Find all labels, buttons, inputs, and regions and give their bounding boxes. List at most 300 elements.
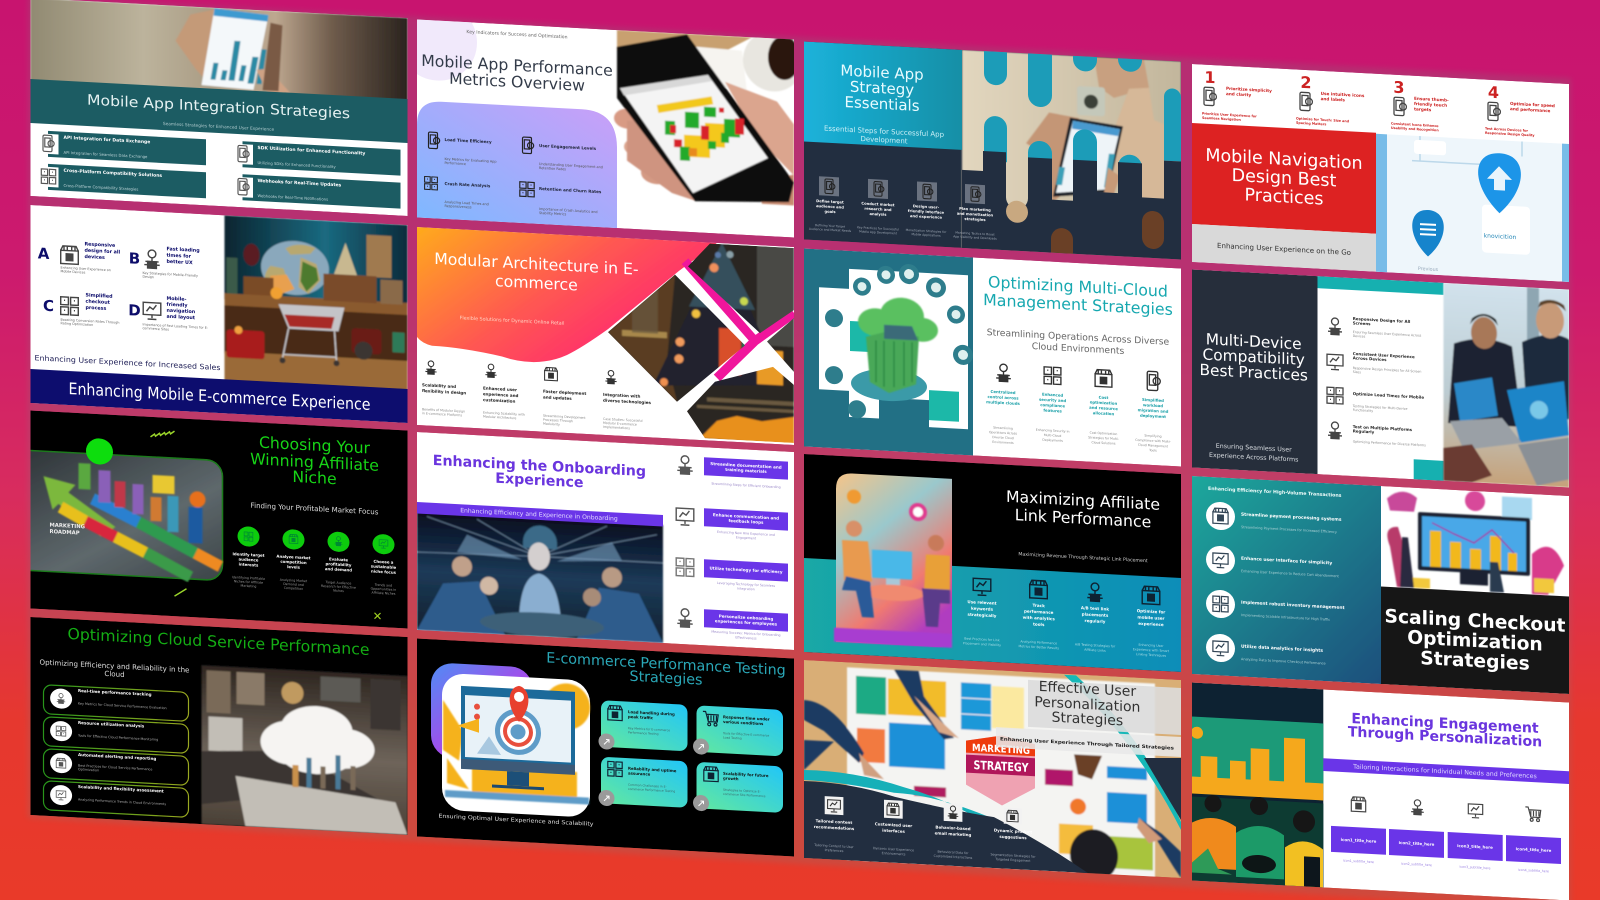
item 3: Target Audience	[325, 580, 351, 586]
pill: resource	[44, 717, 188, 753]
title: Niche	[292, 467, 337, 488]
title: Strategy	[850, 78, 914, 99]
title band	[30, 369, 408, 423]
item 4: Dynamic product	[994, 828, 1032, 835]
step 2	[1296, 73, 1365, 128]
item 1: Tailoring Content to User	[813, 843, 854, 849]
item 3: profitability	[326, 561, 352, 568]
step 2: Engagement	[736, 535, 757, 541]
item A: A	[38, 244, 50, 263]
illustration: analytics monitor	[1387, 486, 1564, 596]
teal lower band	[804, 558, 1181, 672]
metric: retention: Stability Metrics	[539, 211, 566, 216]
photo: person with phone and money roll	[962, 50, 1181, 259]
pill: scalability: Scalability and flexibility assessment	[78, 784, 164, 794]
subtitle box	[996, 727, 1181, 757]
item: SDK utilization: SDK Utilization for Enhanced Functionality	[258, 145, 365, 157]
step 3: Leveraging Technology for Seamless	[717, 581, 775, 588]
item 3: Optimize Load Times for Mobile	[1353, 391, 1424, 400]
step 1: training materials	[725, 467, 767, 474]
metric: crash rate: Responsiveness	[444, 204, 472, 209]
metric: engagement: Understanding User Engagement and	[539, 162, 603, 169]
step 2: Optimize for Touch: Size and	[1296, 117, 1350, 123]
step 4: Plan marketing	[959, 207, 991, 212]
star accent	[374, 613, 380, 619]
step 2: Enhance communication and	[713, 512, 779, 521]
title: Choosing Your	[259, 433, 371, 458]
item 3	[321, 531, 356, 594]
item 2: Track	[1033, 603, 1045, 608]
column 2: Deployments	[1042, 438, 1063, 443]
item A	[38, 242, 120, 274]
item 4: Case Studies: Successful	[603, 417, 643, 423]
title: Modular Architecture in E-	[434, 249, 639, 279]
slide: Mobile App Performance Metrics Overview	[397, 0, 803, 238]
slide: Mobile Navigation Design Best Practices	[1192, 64, 1569, 282]
item D: and layout	[166, 314, 196, 321]
column 4: Cloud Management	[1138, 443, 1169, 448]
squiggle accent	[150, 430, 175, 438]
title: Mobile App Integration Strategies	[87, 93, 350, 122]
slide: Enhancing the Onboarding Experience	[417, 432, 794, 650]
step 4	[953, 183, 997, 241]
slide: Choosing Your Winning Affiliate Niche	[10, 409, 408, 628]
slide: Enhancing Engagement Through Personalization	[1191, 682, 1569, 900]
step 2	[676, 507, 788, 542]
column 1: Diverse Cloud	[992, 435, 1014, 440]
icon box 4: icon4_subtitle_here	[1518, 868, 1549, 873]
item 1	[422, 360, 466, 418]
item 3: Streamlining Development	[543, 414, 586, 420]
item 4: Targeted Engagement	[994, 857, 1031, 863]
subtitle: Key Indicators for Success and Optimization	[466, 29, 568, 40]
card 3: Common Challenges in E-	[628, 783, 667, 789]
panel heading: Enhancing Efficiency for High-Volume Transactions	[1208, 486, 1342, 499]
pill: alerting: Automated alerting and reporting	[78, 752, 156, 761]
slide: Mobile App Integration Strategies	[30, 0, 408, 216]
step 3	[1391, 78, 1449, 133]
item 1: Preferences	[825, 848, 844, 853]
item 4	[1328, 422, 1426, 447]
step 2: feedback loops	[729, 518, 764, 525]
item 4: Regularly	[1353, 428, 1375, 434]
item 2: interfaces	[882, 828, 905, 834]
metric: engagement: User Engagement Levels	[539, 143, 597, 151]
slide: Optimizing Multi-Cloud Management Strategies	[804, 248, 1181, 466]
subtitle: Enhancing User Experience Through Tailored Strategies	[1000, 736, 1174, 752]
card 2: Response time under	[723, 714, 770, 722]
card 3: commerce Performance Testing	[628, 787, 675, 793]
row 2	[1206, 545, 1340, 580]
step 4: Marketing Tactics to Boost	[955, 231, 995, 237]
column 3: Cost Optimization	[1090, 431, 1117, 436]
step 1: goals	[824, 210, 836, 214]
step 2: research and	[864, 207, 892, 212]
title: Essentials	[844, 93, 920, 115]
metric: crash rate	[425, 177, 491, 210]
column 2	[1036, 366, 1069, 443]
item 2: Consistent User Experience	[1353, 351, 1415, 359]
item 3: Processes Through	[543, 418, 573, 423]
step 4: and performance	[1510, 106, 1551, 113]
step 4: Measuring Success: Metrics for Onboarding	[711, 630, 781, 637]
item 4: niche focus	[371, 569, 397, 575]
icon box 1: icon1_subtitle_here	[1343, 859, 1374, 864]
illustration: two people at laptop	[834, 473, 952, 648]
title band	[30, 79, 408, 143]
item 2	[1327, 350, 1421, 378]
column 1: control across	[987, 394, 1019, 401]
column 2: Multi-Cloud	[1044, 433, 1061, 438]
item 1: keywords	[971, 606, 994, 612]
step 4: strategies	[964, 217, 986, 222]
title: E-commerce Performance Testing	[546, 650, 786, 679]
item 4: Experience with Smart	[1133, 647, 1170, 653]
item 1: strategically	[968, 612, 997, 618]
row 3: Implement robust inventory management	[1241, 600, 1345, 611]
subtitle: Enhancing User Experience for Increased Sales	[34, 353, 221, 372]
step 3: targets	[1414, 106, 1432, 112]
item 4: experience	[1138, 621, 1164, 627]
item 2: performance	[1024, 608, 1054, 615]
item 2: Enhancements	[882, 851, 906, 856]
step 2: Enhancing New Hire Experience and	[717, 530, 775, 537]
item 2	[276, 529, 311, 591]
title: Winning Affiliate	[250, 449, 379, 475]
slide: Effective User Personalization Strategies	[804, 660, 1181, 886]
item 1: Best Practices for Link	[964, 636, 1000, 642]
step 2: Conduct market	[861, 202, 895, 207]
item 1: Scalability and	[422, 382, 456, 389]
column 4: Compliance with Multi-	[1135, 438, 1171, 444]
column 3: Strategies for Multi-	[1088, 435, 1119, 441]
card 1: Performance Testing	[628, 730, 659, 736]
title: Mobile Navigation	[1205, 146, 1363, 174]
step 3: Integration	[737, 586, 755, 591]
step 1: Defining Your Target	[815, 223, 846, 229]
step 4: experiences for employees	[715, 618, 778, 627]
item 3: A/B test link	[1081, 605, 1109, 612]
item 3: Faster deployment	[543, 389, 586, 396]
teal right curve	[1064, 675, 1181, 830]
photo: hand holding phone	[30, 0, 408, 106]
item 3: Modularity	[543, 422, 560, 427]
step 3: Consistent Icons Enhance	[1391, 122, 1439, 128]
step 4	[1485, 83, 1555, 139]
item 1: Identify target	[232, 551, 265, 558]
item 1: Placement and Visibility	[963, 641, 1001, 647]
item 2: Dynamic User Experience	[873, 846, 914, 852]
title: Management Strategies	[983, 290, 1173, 319]
title: Enhancing Engagement	[1351, 711, 1539, 737]
step 2: Mobile App Development	[859, 229, 898, 235]
item B: Design	[142, 275, 154, 279]
pill: alerting	[44, 749, 188, 785]
item 2: tools	[1033, 622, 1045, 627]
marketing strategy hexagon: MARKETING	[972, 743, 1030, 757]
roadmap image: MARKETING	[50, 523, 85, 530]
subtitle: Ensuring Optimal User Experience and Scalability	[439, 814, 594, 828]
column 3: Cloud Solutions	[1091, 440, 1116, 446]
item 3	[1075, 582, 1116, 653]
illustration: audience and bar chart	[1191, 682, 1323, 887]
card 4: commerce Site Performance	[723, 792, 766, 798]
item 2	[873, 799, 914, 857]
icon box 1: icon1_title_here	[1341, 837, 1377, 844]
step 4: 4	[1488, 83, 1499, 102]
item 2: customization	[483, 397, 516, 404]
metric: engagement: Retention Rates	[539, 166, 566, 171]
item 2: Modular Architecture	[483, 415, 516, 420]
step 2: Use intuitive icons	[1321, 91, 1365, 98]
card 4: Scalability for future	[723, 771, 769, 778]
photo: team with visor	[417, 512, 663, 643]
step 2	[857, 178, 899, 236]
slide: Enhancing Mobile E-commerce Experience	[30, 205, 408, 423]
item 3: Behavioral Data for	[938, 850, 969, 855]
title box	[1028, 680, 1181, 735]
column 1: Centralized	[990, 389, 1016, 395]
step 3: Monetization Strategies for	[906, 228, 947, 234]
metric: retention: Importance of Crash Analytics and	[539, 207, 598, 214]
column 4: deployment	[1140, 413, 1166, 419]
title: Maximizing Affiliate	[1006, 487, 1160, 514]
item 4: Opportunities in	[371, 587, 396, 592]
item C: Rating Optimization	[60, 321, 93, 327]
item 2: Analyzing Market	[280, 578, 308, 583]
title: Strategies	[1052, 710, 1123, 729]
item 4: Linking Techniques	[1136, 652, 1166, 658]
item 3: regularly	[1085, 618, 1106, 624]
dark lower overlays	[962, 150, 1181, 259]
item A: Responsive	[84, 241, 116, 249]
item 1: in E-commerce Platforms	[422, 411, 462, 417]
metric: retention	[520, 182, 602, 218]
item C: checkout	[86, 299, 111, 306]
dark curved footer	[804, 781, 1088, 873]
item 1	[963, 578, 1001, 647]
item 2: with analytics	[1023, 615, 1055, 621]
item 1: Responsive Design for All	[1353, 316, 1411, 324]
item 4: Integration with	[603, 392, 641, 399]
item 4: Optimize for	[1137, 608, 1165, 615]
column 4: workload	[1143, 402, 1163, 408]
item 1: recommendations	[814, 824, 855, 831]
photo: team with laptops	[1444, 283, 1569, 487]
item 2: Analyzing Performance	[1020, 639, 1057, 645]
item 1	[232, 526, 265, 589]
item 4: Affiliate Niches	[372, 591, 396, 596]
card 1: Key Metrics for E-commerce	[628, 726, 670, 732]
card 1: Load handling during	[628, 709, 675, 717]
item 3: email marketing	[935, 830, 972, 837]
icon box 2: icon2_subtitle_here	[1401, 862, 1432, 867]
item 3: and demand	[325, 566, 352, 573]
step 3: Ensure thumb-	[1414, 96, 1449, 103]
step 1: 1	[1204, 68, 1216, 87]
item 3: Functionality	[1353, 408, 1373, 413]
card 2: Tools for Effective E-commerce	[722, 731, 769, 738]
step 3: friendly touch	[1414, 101, 1447, 108]
item 1: Screens	[1353, 320, 1371, 326]
item 4: Choose a	[374, 559, 394, 565]
slide: E-commerce Performance Testing Strategies	[417, 638, 794, 856]
slide: Modular Architecture in E-commerce	[417, 227, 794, 445]
subtitle: Streamlining Operations Across Diverse	[987, 327, 1170, 348]
column 1	[986, 363, 1020, 445]
photo: cloud over laptop	[202, 665, 408, 835]
item 1: Benefits of Modular Design	[422, 407, 465, 414]
item: cross-platform: Cross-Platform Compatibility Strategies	[64, 183, 138, 192]
photo: location pins: knovicition	[1484, 232, 1516, 241]
step 2: Key Practices for Successful	[857, 225, 899, 232]
row 3	[1206, 589, 1345, 625]
column 1: Environments	[992, 440, 1014, 445]
item 3: placements	[1082, 612, 1109, 618]
row 2: Enhancing User Experience to Reduce Cart Abandonment	[1241, 569, 1340, 578]
item C	[44, 292, 120, 326]
row 4: Utilize data analytics for insights	[1241, 644, 1323, 654]
item 1: flexibility in design	[422, 388, 466, 395]
gray subtitle block	[1192, 224, 1376, 272]
photo: location pins	[1376, 134, 1569, 282]
item 4: diverse technologies	[603, 398, 652, 405]
column 2: compliance	[1040, 402, 1065, 408]
item 4: Trends and	[374, 583, 392, 588]
photo: globe and shopping cart	[224, 215, 408, 391]
squiggle accent lower	[174, 588, 186, 597]
card 1	[598, 700, 688, 754]
title: Enhancing Mobile E-commerce Experience	[68, 379, 370, 414]
card 3: Reliability and uptime	[628, 766, 677, 773]
title: Enhancing the Onboarding	[433, 453, 646, 480]
item 2: Sizes	[1353, 370, 1361, 374]
item B: Key Strategies for Mobile-Friendly	[142, 271, 198, 278]
step 3: Usability and Recognition	[1391, 126, 1439, 132]
step 1: and clarity	[1226, 91, 1251, 97]
title: Compatibility	[1202, 346, 1305, 369]
slide: Scaling Checkout Optimization Strategies	[1192, 476, 1569, 694]
step 1	[1202, 68, 1272, 124]
roadmap image	[10, 449, 222, 581]
purple band	[417, 502, 663, 527]
item 4	[603, 370, 652, 431]
photo: location pins: Previous	[1418, 266, 1439, 273]
step 3	[906, 181, 947, 238]
card 2: Load Testing	[723, 735, 742, 740]
item B	[130, 246, 200, 279]
item 3: Testing Strategies for Multi-Device	[1352, 404, 1407, 411]
metric: load time: Key Metrics for Evaluating App	[444, 157, 496, 164]
subtitle: Maximizing Revenue Through Strategic Link Placement	[1018, 551, 1148, 564]
slide: Multi-Device Compatibility Best Practices	[1192, 270, 1569, 487]
item 3: and updates	[543, 394, 572, 401]
item B: better UX	[166, 259, 193, 266]
column 1: multiple clouds	[986, 399, 1020, 406]
card 2: various conditions	[723, 719, 764, 726]
marketing strategy hexagon	[966, 734, 1035, 807]
title: Effective User	[1039, 679, 1136, 700]
item D: Mobile-	[166, 296, 187, 303]
item 2: Metrics for Better Results	[1019, 644, 1059, 650]
roadmap image: ROADMAP	[50, 529, 80, 537]
pink cross	[685, 261, 794, 382]
item 1: Use relevant	[967, 599, 997, 606]
step 2: Spacing Matters	[1296, 121, 1326, 126]
pill: real-time	[44, 685, 188, 721]
title: Personalization	[1034, 694, 1140, 716]
item 2: Competition	[284, 586, 303, 591]
title: Mobile App	[840, 61, 924, 84]
item 1: Niches for Affiliate	[234, 579, 263, 585]
row 3: Implementing Scalable Infrastructure for High Traffic	[1241, 613, 1330, 622]
item 2: levels	[287, 564, 301, 570]
item B: Fast loading	[166, 246, 200, 254]
photo: phone with chart	[614, 23, 803, 207]
cyan header block	[804, 42, 962, 150]
title: Practices	[1245, 185, 1323, 210]
metrics panel	[417, 100, 617, 228]
column 2: Enhanced	[1042, 392, 1063, 398]
item: webhooks: Webhooks for Real-Time Notifications	[258, 193, 328, 202]
teal left panel	[1192, 476, 1381, 684]
item 3	[543, 367, 586, 428]
item A: design for all	[84, 248, 120, 256]
item 2: Enhancing Scalability with	[483, 411, 525, 417]
subtitle: Essential Steps for Successful App	[824, 125, 945, 139]
item 1: interests	[239, 562, 259, 568]
item C: Boosting Conversion Rates Through	[60, 318, 119, 325]
subtitle: Experience Across Platforms	[1209, 452, 1298, 464]
row 1	[1206, 501, 1342, 536]
purple band	[1323, 758, 1569, 784]
step 3	[676, 558, 788, 593]
photo diamonds: pyramid	[602, 237, 794, 445]
title: Link Performance	[1015, 505, 1151, 531]
item: cross-platform: Cross-Platform Compatibility Solutions	[64, 168, 162, 179]
column 4: migration and	[1138, 407, 1169, 414]
item B: B	[129, 249, 140, 268]
icon box 3: icon3_title_here	[1457, 843, 1493, 850]
right photo capsule	[1142, 210, 1164, 250]
icon box 1	[1331, 796, 1386, 865]
step 3: Design user-	[913, 204, 940, 210]
metric: crash rate: Crash Rate Analysis	[444, 181, 491, 188]
subtitle: Ensuring Seamless User	[1216, 443, 1292, 454]
item D: Importance of Fast Loading Times for E-	[142, 322, 209, 330]
pill: scalability	[44, 781, 188, 817]
teal curve	[804, 770, 1019, 846]
step 4: Effectiveness	[735, 635, 757, 641]
step 4	[677, 608, 788, 642]
gradient header shape	[417, 227, 717, 372]
item 2: Customized user	[875, 821, 912, 828]
subtitle: Cloud Environments	[1032, 341, 1124, 357]
item: API integration: API Integration for Data Exchange	[64, 135, 150, 145]
pill: alerting: Best Practices for Cloud Service Performance	[78, 764, 152, 771]
subtitle: Flexible Solutions for Dynamic Online Retail	[460, 315, 564, 327]
step 4: and monetization	[957, 212, 994, 218]
item 4	[990, 807, 1036, 863]
item D: friendly	[166, 302, 188, 309]
subtitle: Optimizing Efficiency and Reliability in the	[40, 657, 189, 674]
item D: commerce Sites	[142, 326, 169, 332]
item 1: Identifying Profitable	[232, 575, 265, 581]
item 3: Evaluate	[329, 556, 348, 562]
icon box 4	[1506, 806, 1561, 874]
item: webhooks: Webhooks for Real-Time Updates	[258, 178, 342, 188]
slide: Maximizing Affiliate Link Performance	[804, 454, 1181, 672]
